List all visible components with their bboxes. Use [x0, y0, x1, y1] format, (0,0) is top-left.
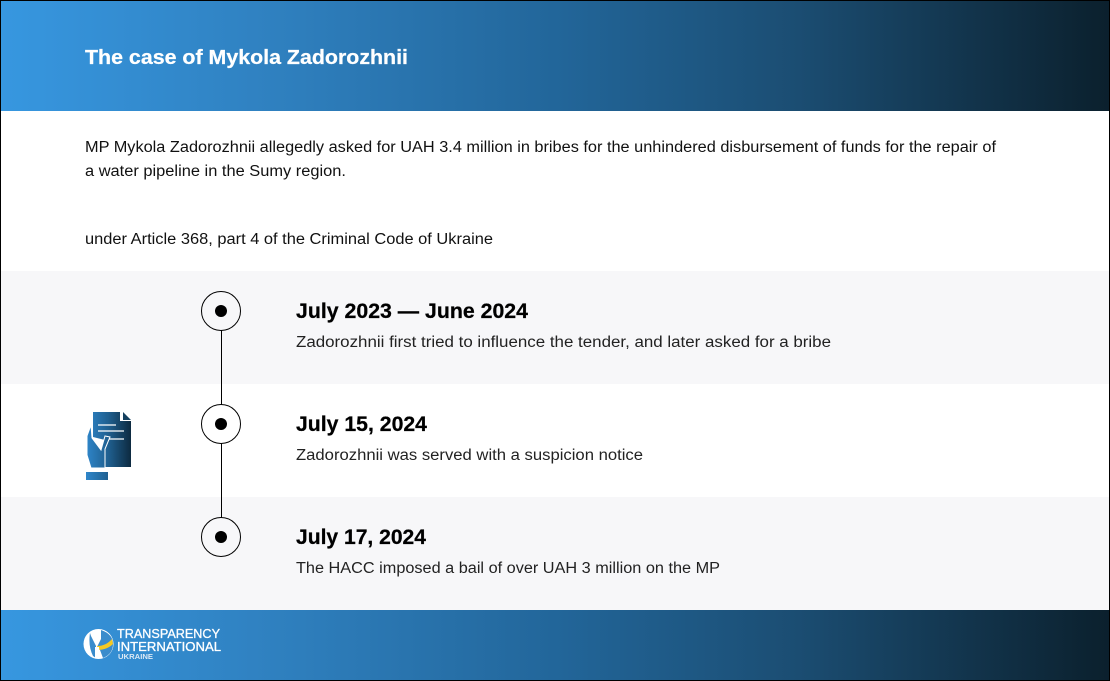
panel: timeline row 1 background — [1, 271, 1109, 384]
icon: hand holding document — [86, 412, 131, 480]
event 3: The HACC imposed a bail of over UAH 3 million on the MP — [296, 560, 720, 577]
logo: Transparency International Ukraine: TRANSPARENCY — [117, 627, 221, 641]
timeline marker 3 — [202, 518, 240, 556]
intro text: a water pipeline in the Sumy region. — [85, 163, 346, 180]
logo: Transparency International Ukraine — [84, 627, 221, 661]
event 3 — [296, 526, 720, 577]
event 2 — [296, 413, 643, 464]
timeline marker 2 — [202, 404, 240, 444]
event 2: Zadorozhnii was served with a suspicion notice — [296, 447, 643, 464]
intro text: MP Mykola Zadorozhnii allegedly asked for UAH 3.4 million in bribes for the unhindered disbursement of funds for the repair of — [85, 139, 997, 156]
intro text — [85, 139, 997, 180]
event 2: July 15, 2024 — [296, 413, 427, 436]
title: The case of Mykola Zadorozhnii — [85, 46, 408, 69]
timeline connector — [221, 330, 222, 518]
header banner — [1, 1, 1109, 111]
event 3: July 17, 2024 — [296, 526, 426, 549]
timeline marker 1 — [202, 292, 240, 330]
footer banner — [1, 610, 1109, 680]
panel: timeline row 3 background — [1, 497, 1109, 610]
event 1: Zadorozhnii first tried to influence the tender, and later asked for a bribe — [296, 334, 831, 351]
legal article text: under Article 368, part 4 of the Criminal Code of Ukraine — [85, 231, 493, 248]
event 1 — [296, 300, 831, 351]
logo: Transparency International Ukraine: UKRAINE — [118, 654, 153, 661]
logo: Transparency International Ukraine: INTERNATIONAL — [117, 640, 221, 654]
event 1: July 2023 — June 2024 — [296, 300, 528, 323]
